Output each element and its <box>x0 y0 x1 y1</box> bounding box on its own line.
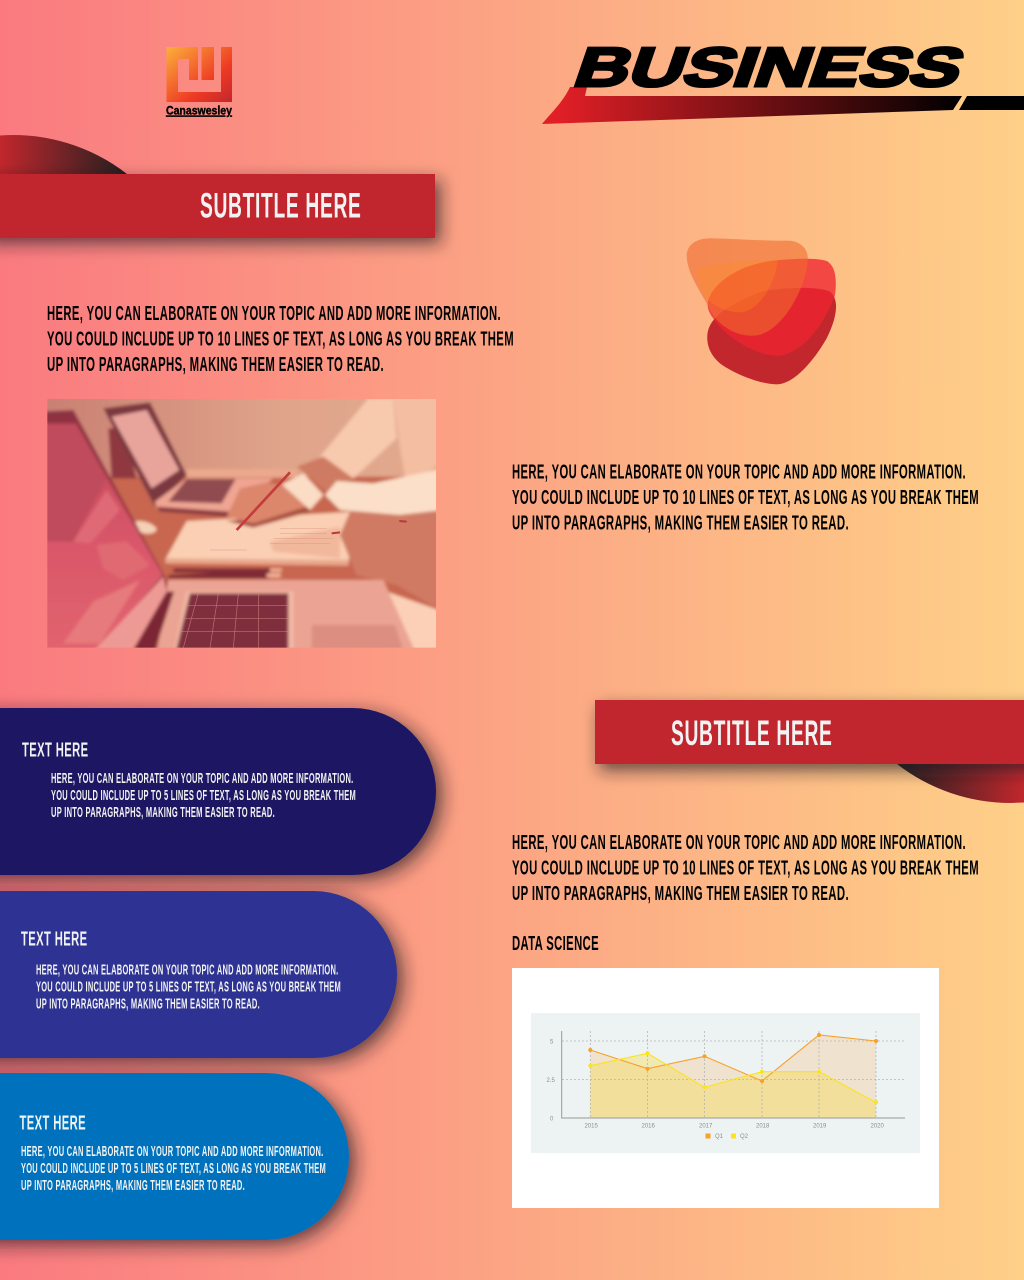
swoosh red to black <box>542 87 962 124</box>
indigo card body: HERE, YOU CAN ELABORATE ON YOUR TOPIC AND ADD MORE INFORMATION. <box>36 962 338 978</box>
banner bar <box>595 700 1024 764</box>
blue card body: HERE, YOU CAN ELABORATE ON YOUR TOPIC AND ADD MORE INFORMATION. <box>21 1144 324 1160</box>
photo: laptops and hands writing on paper <box>40 395 443 655</box>
text block 1 <box>47 302 514 376</box>
blue card body: YOU COULD INCLUDE UP TO 5 LINES OF TEXT, AS LONG AS YOU BREAK THEM <box>21 1161 326 1177</box>
chart legend: Q1 <box>715 1134 724 1140</box>
panel: indigo card <box>0 891 397 1058</box>
area chart Q1 Q2: 2.5 <box>546 1078 556 1084</box>
logo: Canaswesley <box>166 47 233 118</box>
panel: blue card <box>0 1073 349 1240</box>
text block 2 <box>512 460 979 534</box>
area chart Q1 Q2: 2020 <box>870 1124 885 1130</box>
logo mark <box>166 47 232 102</box>
decorative arc lower right <box>897 764 1024 803</box>
chart heading: DATA SCIENCE <box>512 932 599 955</box>
indigo card body <box>36 962 341 1012</box>
blue pill <box>0 1073 349 1240</box>
chart legend: Q2 <box>740 1134 749 1140</box>
blue card heading: TEXT HERE <box>20 1112 86 1134</box>
title text: BUSINESS <box>567 36 973 98</box>
bright red blob <box>708 259 836 356</box>
title: BUSINESS with swoosh <box>542 36 1024 124</box>
panel: navy card <box>0 708 436 875</box>
area chart Q1 Q2: 0 <box>550 1116 554 1122</box>
area chart Q1 Q2: 2019 <box>813 1124 827 1130</box>
orange inner highlight <box>696 260 777 312</box>
indigo card body: UP INTO PARAGRAPHS, MAKING THEM EASIER TO READ. <box>36 996 260 1012</box>
indigo card body: YOU COULD INCLUDE UP TO 5 LINES OF TEXT, AS LONG AS YOU BREAK THEM <box>36 980 341 996</box>
navy card body: UP INTO PARAGRAPHS, MAKING THEM EASIER TO READ. <box>51 805 275 821</box>
banner bar <box>0 174 435 238</box>
area chart Q1 Q2 <box>546 1031 905 1130</box>
navy card heading: TEXT HERE <box>22 740 88 762</box>
dark red blob <box>707 288 836 384</box>
blue card body: UP INTO PARAGRAPHS, MAKING THEM EASIER TO READ. <box>21 1178 245 1194</box>
subtitle text: SUBTITLE HERE <box>200 187 362 226</box>
swoosh black bar <box>959 96 1024 110</box>
area chart Q1 Q2: 5 <box>550 1040 554 1046</box>
panel: chart card <box>512 968 939 1208</box>
white card <box>512 968 939 1208</box>
decorative arc top left <box>0 135 127 174</box>
navy pill <box>0 708 436 875</box>
area chart Q1 Q2: 2018 <box>756 1124 770 1130</box>
indigo pill <box>0 891 397 1058</box>
chart plot area <box>531 1013 920 1153</box>
text block 1: HERE, YOU CAN ELABORATE ON YOUR TOPIC AND ADD MORE INFORMATION. <box>47 302 501 325</box>
subtitle banner 1 <box>0 174 435 238</box>
text block 3 <box>512 831 979 905</box>
logo name: Canaswesley <box>166 106 233 118</box>
text block 1: UP INTO PARAGRAPHS, MAKING THEM EASIER TO READ. <box>47 353 384 376</box>
orange blob <box>687 238 808 336</box>
blue card body <box>21 1144 326 1194</box>
subtitle text: SUBTITLE HERE <box>671 714 832 753</box>
navy card body <box>51 771 356 821</box>
chart legend <box>706 1134 749 1140</box>
navy card body: HERE, YOU CAN ELABORATE ON YOUR TOPIC AND ADD MORE INFORMATION. <box>51 771 354 787</box>
area chart Q1 Q2: 2015 <box>584 1124 599 1130</box>
subtitle banner 2 <box>595 700 1024 764</box>
indigo card heading: TEXT HERE <box>21 928 88 950</box>
text block 1: YOU COULD INCLUDE UP TO 10 LINES OF TEXT, AS LONG AS YOU BREAK THEM <box>47 328 514 350</box>
abstract blob graphic <box>687 238 836 384</box>
area chart Q1 Q2: 2016 <box>642 1124 656 1130</box>
navy card body: YOU COULD INCLUDE UP TO 5 LINES OF TEXT, AS LONG AS YOU BREAK THEM <box>51 788 356 804</box>
area chart Q1 Q2: 2017 <box>699 1124 713 1130</box>
